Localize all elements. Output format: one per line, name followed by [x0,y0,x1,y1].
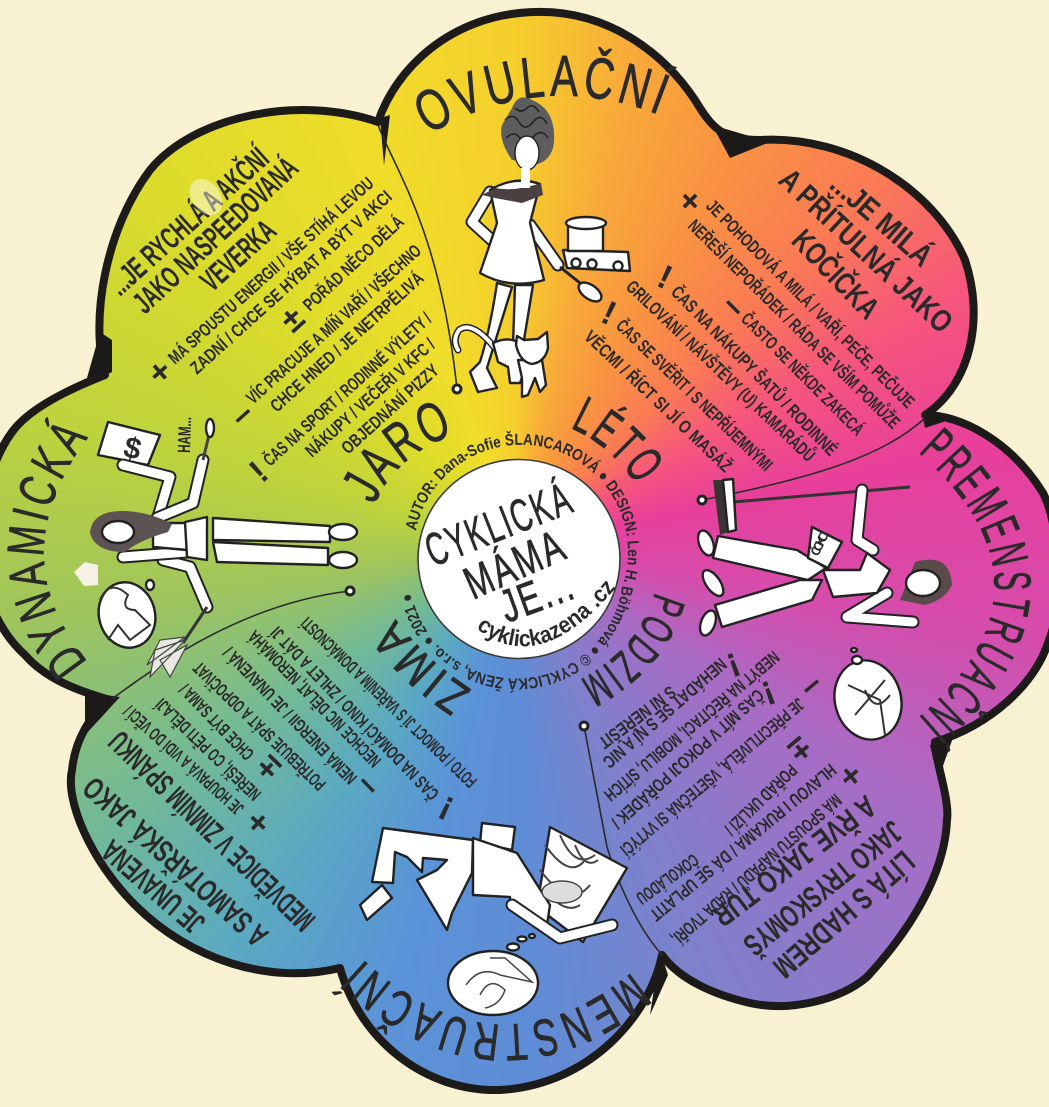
text block: premenstruační (lower right) [595,644,921,985]
centre title: MÁMA [456,519,574,609]
figure: menstrual woman sleeping on pillow [360,823,627,942]
heading: KOČIČKA [785,222,887,326]
heading: ...JE RYCHLÁ A AKČNÍ [101,139,276,302]
traits [595,644,870,950]
heading: JE UNAVENÁ [94,833,212,941]
shoes [329,524,357,540]
traits: MÁ SPOUSTU NÁPADŮ / RÁDA TVOŘÍ, [667,790,847,950]
traits: JE POHODOVÁ A MILÁ / VAŘÍ, PEČE, PEČUJE [702,195,919,412]
traits: MÁ SPOUSTU ENERGII / VŠE STÍHÁ LEVOU [164,172,378,368]
traits: ČAS MÍT V POKOJI POŘÁDEK / [607,685,768,833]
broom [713,479,910,535]
season: zima: ZIMA [376,618,472,716]
season titles [343,396,685,716]
traits: NEHÁDAT SE S NÍ A NIC [599,654,731,773]
traits: POTŘEBUJE SPÁT A ODPOČÍVAT [189,658,330,795]
traits: JE HOUPAVÁ A VIDÍ DO VĚCÍ / [119,701,248,820]
centre circle with title [417,458,621,660]
heading [706,788,921,985]
traits: ! [652,258,678,297]
traits: – [222,394,261,435]
season: léto: LÉTO [572,396,661,480]
speech: ham: HAM... [174,416,195,453]
heading: VEVERKA [193,213,283,298]
book with dollar: $ [120,431,145,467]
head and hair [90,511,172,552]
text block: menstruační (lower left) [75,613,481,955]
title: menstruační: MENSTRUAČNÍ [332,960,652,1061]
traits: ± [273,299,312,340]
traits: VĚCMI / ŘÍCT SI JÍ O MASÁŽ [580,326,737,476]
figure: dynamic woman with many arms [90,416,357,677]
traits: NEŘEŠÍ, CO PĚTI DĚLAJÍ [150,694,265,805]
heading [101,139,305,320]
text block: ovulační (upper right) [580,161,961,476]
book with dollar [98,422,160,467]
traits: ČAS NA NÁKUPY ŠATŮ / RODINNÉ [667,280,843,460]
heading: JAKO NASPEEDOVANÁ [126,150,305,320]
traits: CHCE BÝT SAMA / [175,680,258,765]
centre title: CYKLICKÁ [418,471,580,576]
head [900,560,952,605]
spoon [560,267,605,305]
traits: CHCE HNED / JE NETRPĚLIVÁ [266,267,428,416]
traits: ! [596,294,622,333]
traits: ČAS SE SVĚŘIT I S NEPŘÍJEMNÝMI [612,315,777,475]
traits: GRILOVÁNÍ / NÁVŠTĚVY (U) KAMARÁDŮ [622,275,820,466]
traits [140,172,443,490]
season: podzim: PODZIM [581,594,685,707]
pillow [480,823,515,850]
paper sign: ČOKO [807,528,832,558]
traits: ! [242,454,276,490]
traits: ZADNÍ / CHCE SE HÝBAT A BÝT V AKCI [186,186,396,378]
heading: A SAMOTÁŘSKÁ JAKO [75,770,275,955]
traits: POŘÁD NĚCO DĚLÁ [298,211,408,315]
traits: ! [722,644,745,684]
traits: ! [433,788,459,827]
title: ovulační: OVULAČNÍ [416,46,677,130]
centre title: JE... [493,558,582,632]
traits: FOTO / POMOCT JÍ S VAŘENÍM A DOMÁCNOSTÍ [296,613,481,792]
traits: S NÍ NEŘEŠIT [595,682,680,753]
scratch mark [183,173,229,221]
paper sign [807,527,842,568]
traits: NEMÁ ENERGII / JE UNAVENÁ / [219,643,361,789]
traits: ČASTO SE NĚKDE ZAKECÁ [737,308,869,440]
traits: + [238,802,278,843]
torso [473,838,550,925]
heading: JAKO TRYSKOMYŠ [737,814,910,964]
text block: dynamická (upper left) [101,139,443,490]
traits: – [346,767,387,807]
figure: ovulation woman cooking [455,97,630,397]
traits: – [793,667,832,708]
heading: A PŘÍTULNÁ JAKO [772,161,961,340]
traits: POŘÁD UKLÍZÍ / [720,760,802,840]
heading [75,724,322,955]
website: cyklickazena .cz [478,580,616,646]
season: jaro: JARO [343,402,448,502]
traits: ČAS NA DOMÁCÍ KINO / ZHLET A DÁT JÍ [265,622,443,805]
traits: + [669,181,710,222]
figure: premenstrual woman with broom [695,479,952,638]
heading: ...JE MILÁ [823,166,940,274]
traits: ± [781,729,819,770]
traits: ! [757,672,780,712]
cat [455,327,548,397]
hair [540,835,598,908]
traits: NEŘEŠÍ NEPOŘÁDEK / RÁDA SE VŠÍM POMŮŽE [684,214,905,433]
title: premenstruační: PREMENSTRUAČNÍ [920,427,1032,753]
spoon [203,435,209,460]
traits: ČAS NA SPORT / RODINNÉ VÝLETY / [259,308,435,470]
heading: A ŘVE JAKO TUR [706,788,883,935]
thought bubble: premenstrual [826,648,910,747]
traits: VÍC PRACUJE A MÍŇ VAŘÍ / VŠECHNO [242,240,425,408]
heading: LÍTÁ S HADREM [766,844,921,985]
traits: ČOKOLÁDOU [632,850,703,909]
traits: OBJEDNÁNÍ PIZZY [337,359,443,458]
centre title [418,471,582,632]
thought bubble: dynamic [74,562,163,654]
traits: + [831,755,870,797]
face [515,136,539,170]
legs [372,828,473,930]
petal divider lines [110,125,925,955]
hair [501,97,554,164]
traits [580,181,919,476]
feather duster [147,607,207,677]
traits: NEBÝT NA ŘEČITACÍ, MOBILU, SÍTÍCH [600,647,784,806]
traits: NÁKUPY / VEČEŘI V KFC / [301,334,439,461]
traits: JE PŘECITLIVĚLÁ, VŠETEČNÁ SI VYTÝČÍ [616,694,809,861]
traits: HLAVOU I RUKAMA / DÁ SE UPLATIT [646,760,841,926]
pot on stove [563,217,630,271]
traits: – [714,286,755,326]
credits ring: AUTOR: Dana-Sofie ŠLANCAROVÁ ● DESIGN: Len H. Böhmová ● © CYKLICKÁ ŽENA, s.r.o. ● 2021 ● [404,430,639,693]
traits: NECHCE NIC DĚLAT, NEROMÁHÁ [243,626,385,772]
thought bubble: menstrual [448,934,538,1015]
traits: + [140,351,180,393]
traits [119,613,481,843]
traits: ± [249,747,289,788]
heading [772,161,961,340]
